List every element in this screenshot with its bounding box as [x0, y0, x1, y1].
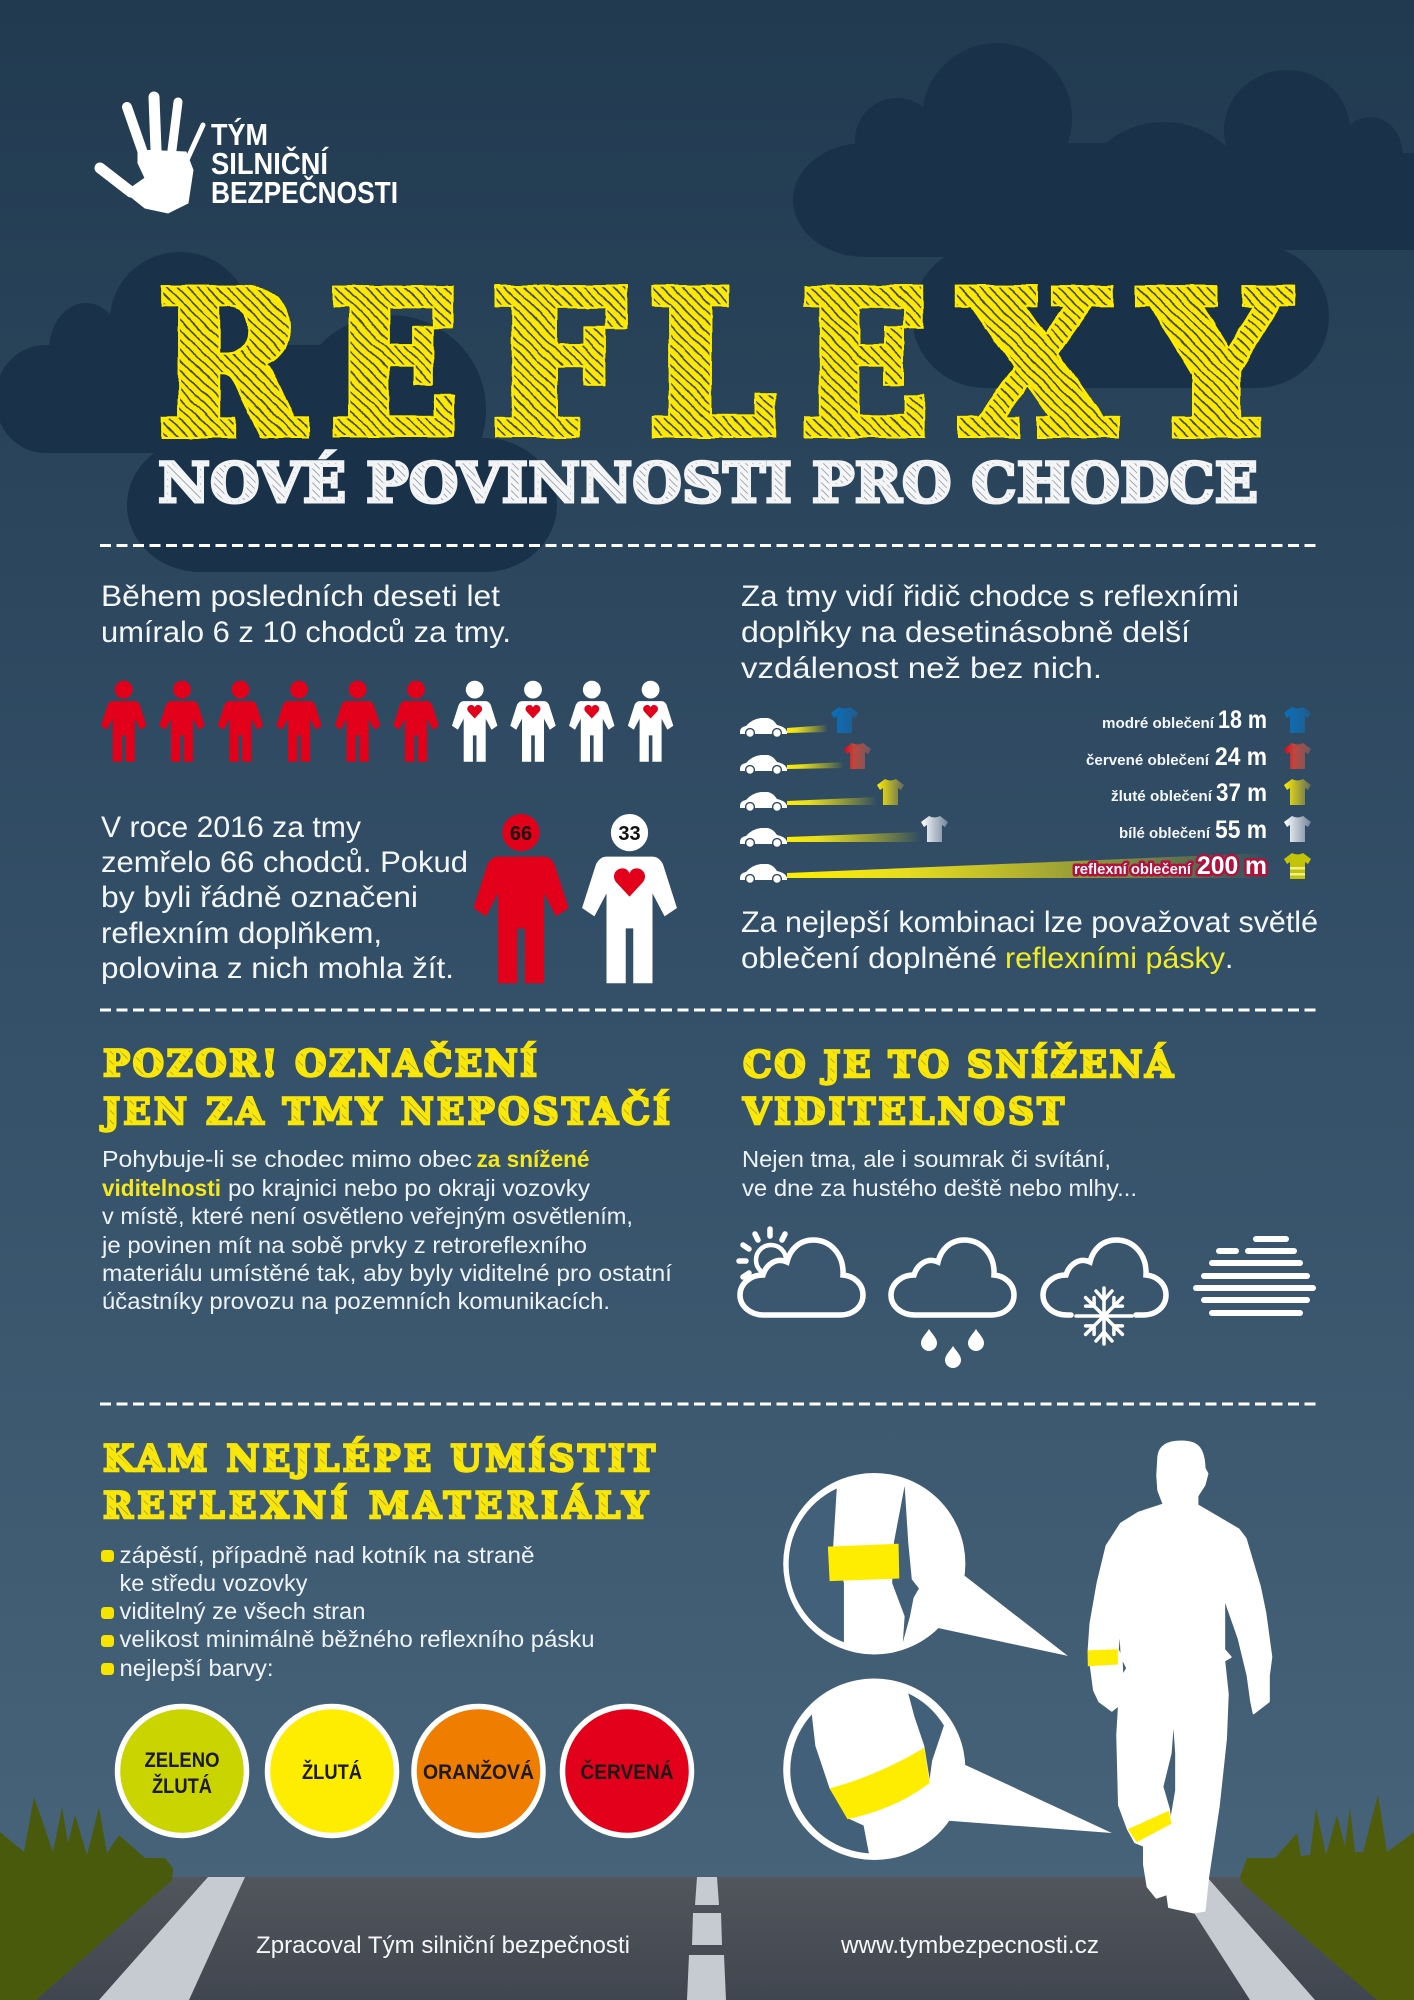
road: [0, 1877, 1414, 2000]
row: white clothing 55 m: [740, 816, 1311, 847]
grass left: [0, 1797, 173, 2000]
text: driver sees further: [741, 580, 1239, 685]
red figure 66: 66: [510, 823, 532, 845]
heading: where to place reflective materials: REFLEXNÍ MATERIÁLY: [103, 1485, 649, 1527]
chart: visibility distance by clothing: [740, 706, 1311, 883]
bullet list: nejlepší barvy:: [120, 1655, 274, 1681]
heading: where to place reflective materials: KAM NEJLÉPE UMÍSTIT: [103, 1438, 655, 1480]
heading: what is reduced visibility: VIDITELNOST: [742, 1091, 1064, 1133]
callout: ankle: [783, 1679, 1112, 1860]
heading: marking only in the dark is not enough: POZOR! OZNAČENÍ: [103, 1043, 537, 1085]
row: yellow clothing 37 m: [740, 779, 1311, 811]
icon: white hand print: [100, 97, 203, 213]
row: red clothing 24 m: červené oblečení: [1086, 752, 1210, 769]
pictogram row: 6 of 10 pedestrians: [101, 681, 673, 762]
big figures: 66 and 33: [474, 814, 677, 983]
bullet list: [101, 1542, 594, 1681]
row: red clothing 24 m: 24 m: [1215, 743, 1267, 771]
text: year 2016: V roce 2016 za tmy: [101, 811, 361, 844]
callout: wrist: [783, 1473, 1068, 1656]
circle: yellow: ŽLUTÁ: [302, 1760, 362, 1784]
text: driver sees further: vzdálenost než bez nich.: [741, 652, 1102, 685]
paragraph: legal duty: je povinen mít na sobě prvky z retroreflexního: [101, 1232, 587, 1258]
text: dying in the dark statistic: umíralo 6 z 10 chodců za tmy.: [101, 616, 511, 649]
heading: marking only in the dark is not enough: [100, 1043, 670, 1133]
bullet list: viditelný ze všech stran: [120, 1598, 366, 1624]
icon: sun and cloud: [739, 1229, 863, 1315]
row: yellow clothing 37 m: 37 m: [1216, 779, 1267, 807]
circle: orange: [414, 1706, 543, 1836]
logo wordmark: BEZPEČNOSTI: [211, 174, 398, 210]
paragraph: legal duty: po krajnici nebo po okraji vozovky: [228, 1175, 591, 1201]
circle: green-yellow: ŽLUTÁ: [152, 1774, 212, 1798]
right road edge line: [1171, 1877, 1315, 2000]
dark clouds top right: [793, 43, 1414, 388]
footer credit: Zpracoval Tým silniční bezpečnosti: [256, 1932, 630, 1959]
icon: rain cloud: [891, 1240, 1014, 1368]
text: year 2016: zemřelo 66 chodců. Pokud: [101, 846, 468, 879]
title: REFLEXY: F: [490, 250, 625, 480]
text: reduced visibility: ve dne za hustého deště nebo mlhy...: [742, 1175, 1137, 1201]
row: white clothing 55 m: 55 m: [1215, 816, 1267, 844]
text: driver sees further: doplňky na desetinásobně delší: [741, 616, 1191, 649]
row: blue clothing 18 m: [740, 706, 1311, 737]
subtitle: NOVÉ POVINNOSTI PRO CHODCE: [158, 450, 1258, 515]
text: driver sees further: Za tmy vidí řidič chodce s reflexními: [741, 580, 1239, 613]
logo wordmark: TÝM: [211, 117, 268, 152]
text: dying in the dark statistic: Během posledních deseti let: [101, 580, 501, 613]
row: red clothing 24 m: [740, 743, 1311, 774]
circle: red: [562, 1706, 692, 1836]
footer website: www.tymbezpecnosti.cz: [840, 1932, 1099, 1959]
title: REFLEXY: [158, 250, 1290, 480]
title: REFLEXY: E: [800, 250, 929, 480]
icon: fog: [1196, 1239, 1313, 1313]
heading: where to place reflective materials: [103, 1438, 655, 1527]
text: year 2016: polovina z nich mohla žít.: [101, 952, 454, 985]
text: best combination: .: [1225, 942, 1233, 975]
text: dying in the dark statistic: [101, 580, 511, 649]
centre dashes: [687, 1877, 726, 2000]
heading: marking only in the dark is not enough: JEN ZA TMY NEPOSTAČÍ: [100, 1091, 670, 1133]
man silhouette: [1087, 1441, 1271, 1913]
text: best combination: oblečení doplněné: [741, 942, 997, 975]
text: best combination: reflexními pásky: [1005, 942, 1225, 975]
row: white clothing 55 m: bílé oblečení: [1119, 825, 1211, 842]
bullet list: zápěstí, případně nad kotník na straně: [120, 1542, 534, 1568]
walking man with bands and callouts: [783, 1441, 1271, 1913]
white figure 33: [582, 814, 677, 983]
paragraph: legal duty: materiálu umístěné tak, aby byly viditelné pro ostatní: [102, 1260, 673, 1286]
red figure 66: [474, 814, 568, 983]
row: reflective clothing 200 m: reflexní oblečení: [1074, 861, 1192, 878]
row: blue clothing 18 m: modré oblečení: [1102, 715, 1215, 732]
icon: snow cloud: [1043, 1240, 1166, 1344]
title: REFLEXY: X: [959, 250, 1115, 480]
circle: yellow: [268, 1706, 396, 1836]
paragraph: legal duty: v místě, které není osvětleno veřejným osvětlením,: [102, 1203, 633, 1229]
text: year 2016: by byli řádně označeni: [101, 881, 418, 914]
circle: red: ČERVENÁ: [580, 1760, 674, 1784]
text: reduced visibility: Nejen tma, ale i soumrak či svítání,: [742, 1146, 1111, 1172]
row: reflective clothing 200 m: 200 m: [1197, 852, 1267, 880]
grass right: [1240, 1795, 1414, 2000]
paragraph: legal duty: [101, 1146, 673, 1314]
title: REFLEXY: L: [648, 250, 775, 480]
bullet list: ke středu vozovky: [120, 1570, 308, 1596]
white figure 33: 33: [618, 823, 641, 845]
colour circles: [118, 1706, 692, 1836]
paragraph: legal duty: viditelnosti: [102, 1175, 221, 1201]
paragraph: legal duty: za snížené: [476, 1146, 590, 1172]
left road edge line: [99, 1877, 245, 2000]
row: yellow clothing 37 m: žluté oblečení: [1111, 788, 1213, 805]
text: year 2016: [101, 811, 468, 985]
title: REFLEXY: Y: [1140, 250, 1290, 480]
text: reduced visibility: [742, 1146, 1137, 1201]
paragraph: legal duty: účastníky provozu na pozemních komunikacích.: [102, 1288, 610, 1314]
title: REFLEXY: R: [158, 250, 306, 480]
text: best combination: Za nejlepší kombinaci lze považovat světlé: [741, 906, 1318, 939]
logo wordmark: [211, 117, 398, 210]
logo wordmark: SILNIČNÍ: [211, 145, 329, 181]
row: blue clothing 18 m: 18 m: [1218, 706, 1267, 734]
weather icons: [739, 1229, 1313, 1368]
dark clouds left: [0, 252, 557, 572]
circle: green-yellow: [118, 1706, 246, 1836]
text: best combination: [741, 906, 1318, 975]
heading: what is reduced visibility: CO JE TO SNÍŽENÁ: [743, 1044, 1174, 1086]
row: reflective clothing 200 m: [740, 852, 1311, 883]
heading: what is reduced visibility: [742, 1044, 1174, 1133]
bullet list: velikost minimálně běžného reflexního pásku: [120, 1626, 594, 1652]
circle: orange: ORANŽOVÁ: [423, 1760, 534, 1784]
text: year 2016: reflexním doplňkem,: [101, 917, 382, 950]
logo: Tým silniční bezpečnosti: [100, 97, 398, 213]
title: REFLEXY: E: [329, 250, 459, 480]
paragraph: legal duty: Pohybuje-li se chodec mimo obec: [102, 1146, 472, 1172]
circle: green-yellow: ZELENO: [144, 1749, 220, 1772]
